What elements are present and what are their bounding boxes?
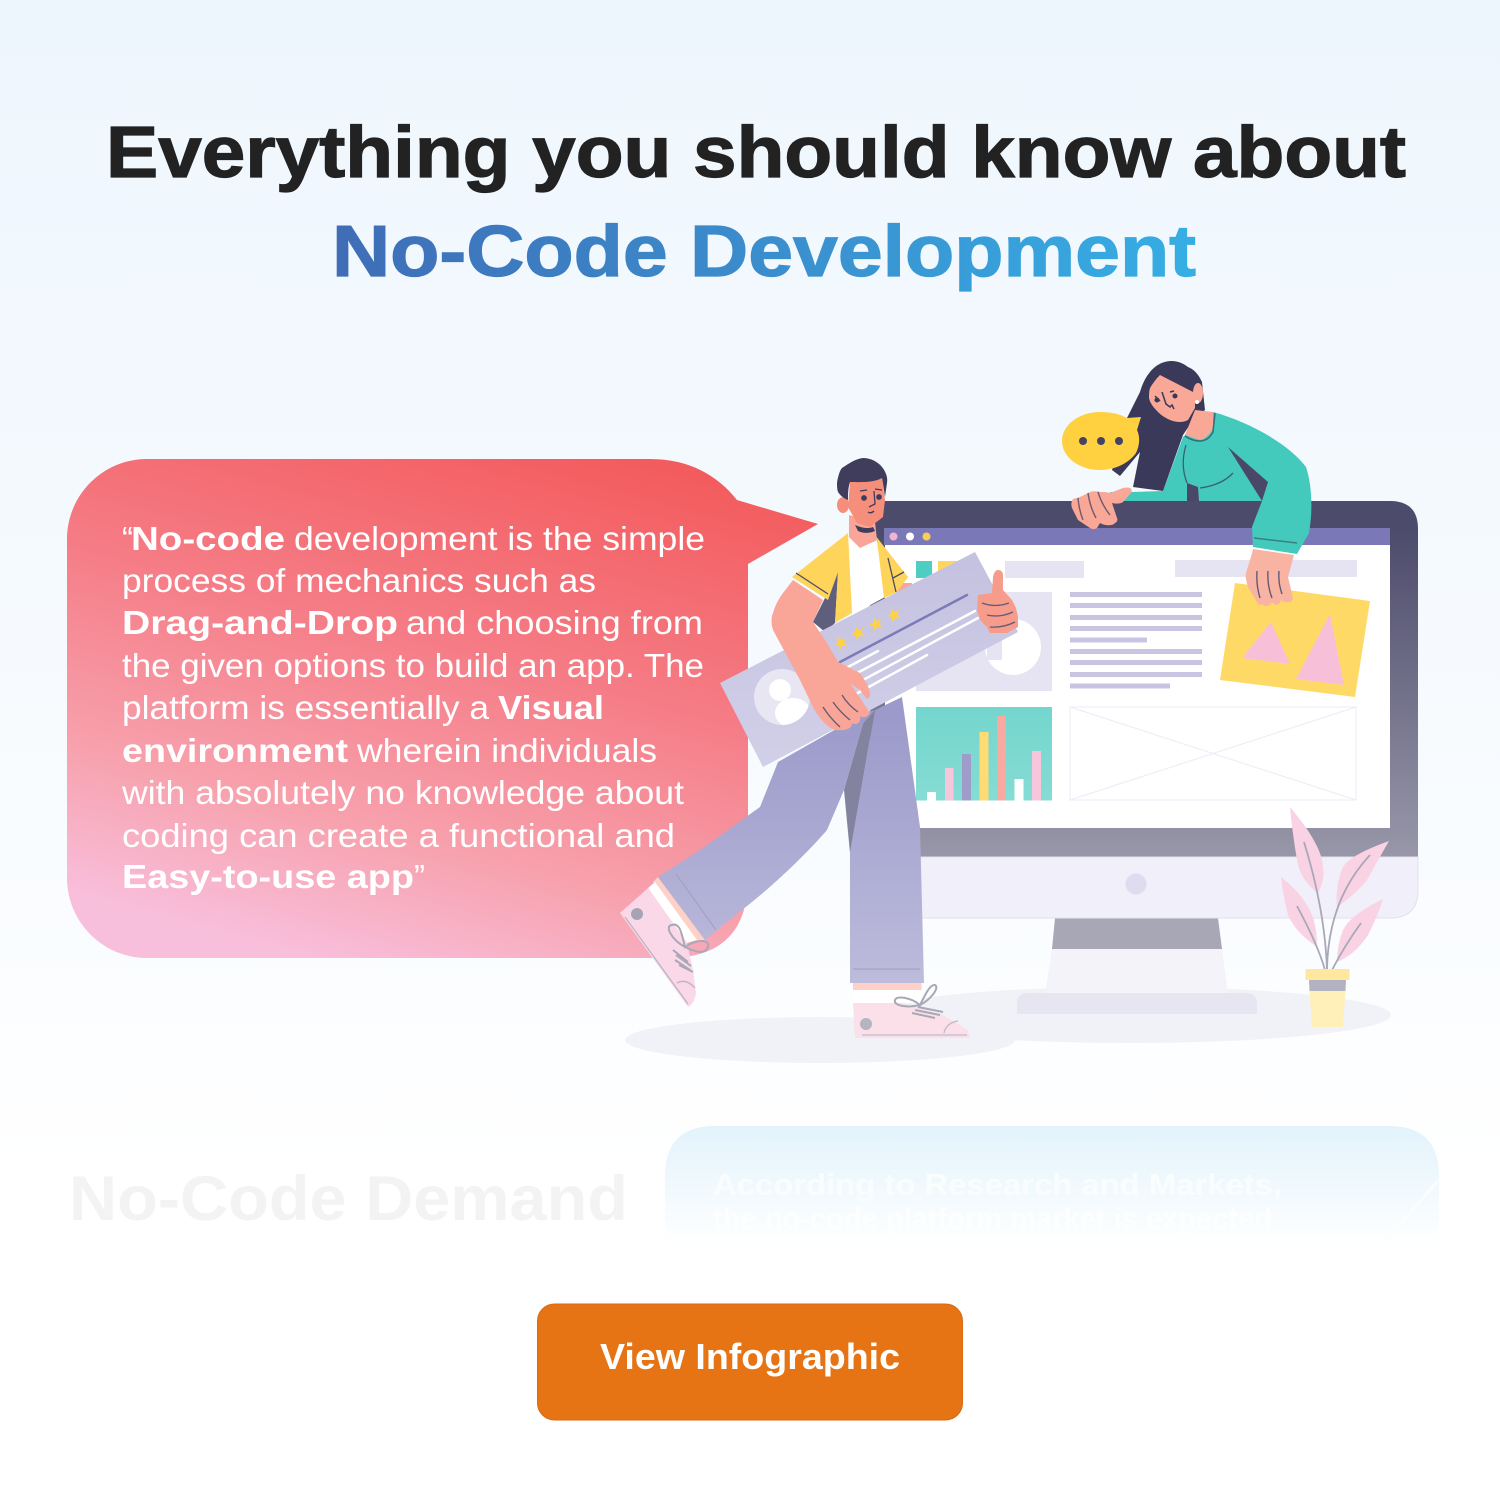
bubble text: “	[122, 520, 133, 557]
bar chart	[916, 707, 1052, 800]
panel text: According to Research and Markets,	[713, 1167, 1282, 1202]
bubble text: platform is essentially a	[122, 689, 490, 726]
panel background	[665, 1126, 1439, 1246]
illustration: desktop monitor	[870, 501, 1418, 1014]
monitor chin	[870, 857, 1418, 918]
card lines	[840, 595, 978, 694]
hair	[837, 458, 887, 500]
trouser creases	[676, 874, 920, 969]
hand gripping monitor	[1071, 488, 1132, 529]
bubble text: No-code	[131, 520, 285, 557]
yellow sheet with triangles	[1220, 583, 1370, 697]
hair	[1112, 361, 1205, 491]
beard	[855, 525, 875, 533]
ear and earring	[1193, 383, 1203, 404]
title line 1: Everything you should know about	[106, 113, 1406, 193]
armpit shadow	[1228, 447, 1268, 501]
review card	[720, 552, 1018, 767]
sleeve cuff line	[1254, 538, 1297, 543]
floor shadows	[625, 987, 1391, 1063]
bubble text	[121, 520, 705, 895]
illustration: potted plant	[1281, 807, 1389, 1027]
panel: definition speech bubble	[67, 459, 818, 958]
power button	[1126, 874, 1146, 894]
faded section: no-code demand heading: No-Code Demand	[69, 1164, 628, 1234]
yellow chat bubble	[1062, 412, 1141, 470]
hand holding sheet	[1246, 549, 1294, 606]
bubble text: with absolutely no knowledge about	[121, 774, 684, 811]
bubble text: process of mechanics such as	[122, 562, 596, 599]
monitor frame	[870, 501, 1418, 857]
facial features	[860, 489, 882, 513]
stems	[1297, 842, 1370, 970]
button: view infographic	[538, 1304, 962, 1420]
text lines	[1070, 592, 1202, 688]
bubble text: Drag-and-Drop	[122, 604, 398, 641]
bubble text: the given options to build an app. The	[122, 647, 704, 684]
face	[1149, 375, 1195, 422]
face	[848, 478, 885, 527]
facial features	[1155, 391, 1177, 409]
trouser shadow	[844, 710, 875, 853]
avatar	[754, 669, 811, 728]
back leg	[850, 697, 924, 983]
front foot	[620, 877, 708, 1007]
faded section: market panel: the no-code platform market is expected	[713, 1201, 1272, 1236]
faded section: market panel	[665, 1126, 1439, 1246]
wireframe image placeholder	[1070, 707, 1356, 800]
illustration: woman leaning on monitor	[1062, 361, 1311, 606]
front leg	[658, 710, 875, 940]
bubble text: environment	[122, 732, 348, 769]
shirt shadow	[813, 572, 838, 632]
small arm behind card	[897, 583, 912, 592]
screen	[885, 545, 1390, 828]
bubble text: development is the simple	[294, 520, 705, 557]
bubble text: wherein individuals	[356, 732, 657, 769]
bubble text: ”	[414, 858, 425, 895]
white t-shirt	[848, 537, 885, 615]
monitor stand	[1017, 918, 1257, 1014]
pot	[1306, 969, 1350, 1027]
panel decorative line	[1385, 1180, 1439, 1240]
leaves	[1281, 807, 1389, 962]
stars	[832, 605, 903, 651]
neck	[1185, 410, 1213, 440]
title	[106, 113, 1406, 292]
bubble text: Visual	[498, 689, 604, 726]
arm and hand over card	[772, 580, 870, 730]
sweater	[1110, 412, 1311, 554]
bubble text: Easy-to-use app	[122, 858, 414, 895]
back foot	[853, 983, 970, 1038]
ear	[837, 497, 849, 513]
illustration: man holding review card	[620, 458, 1018, 1038]
header blocks	[916, 560, 1357, 578]
bubble shape	[67, 459, 818, 958]
sweater folds	[1183, 445, 1233, 488]
image block	[916, 592, 1052, 691]
title line 2: No-Code Development	[332, 212, 1196, 292]
collar	[1185, 413, 1215, 441]
bubble text: and choosing from	[406, 604, 703, 641]
yellow vest	[792, 533, 908, 623]
browser toolbar	[884, 528, 1390, 545]
bubble text: coding can create a functional and	[122, 817, 675, 854]
button: view infographic: View Infographic	[600, 1336, 900, 1377]
neck	[849, 515, 877, 548]
thumbs up hand	[977, 570, 1018, 633]
torso gap	[1187, 483, 1199, 501]
